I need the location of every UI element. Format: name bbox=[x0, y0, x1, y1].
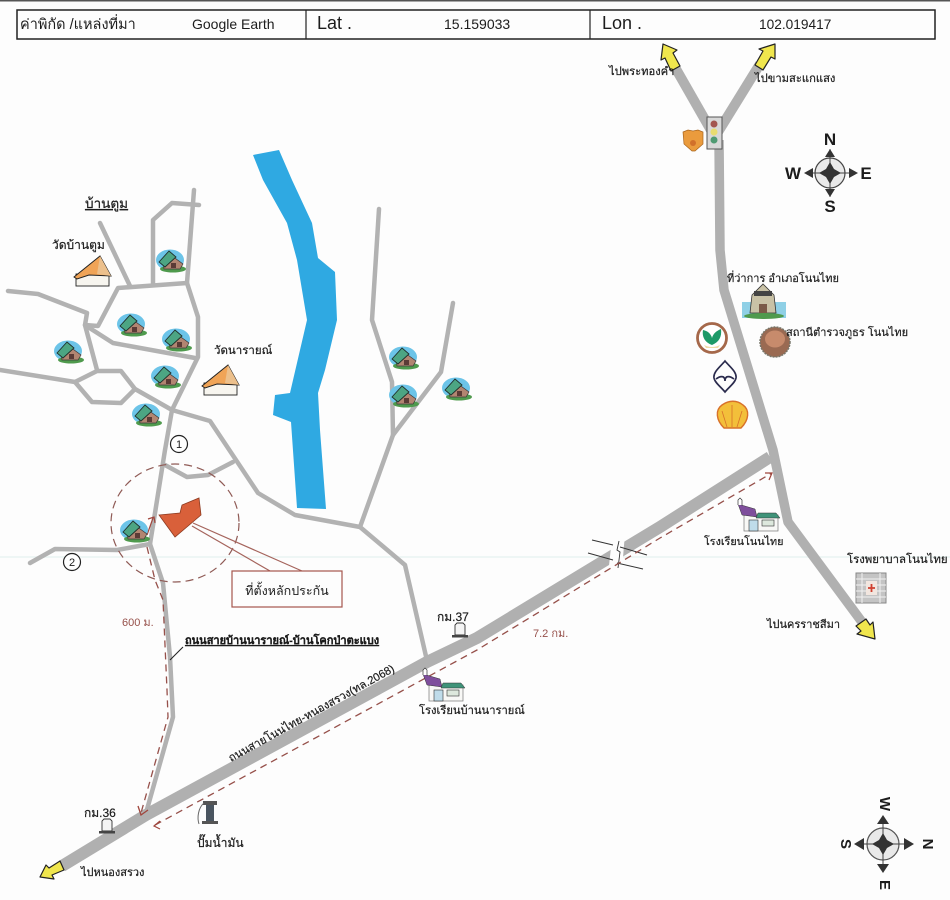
labels: สถานีตำรวจภูธร โนนไทย bbox=[786, 325, 908, 339]
compass north bbox=[785, 130, 872, 216]
labels: ถนนสายบ้านนารายณ์-บ้านโคกป่าตะแบง bbox=[185, 633, 379, 647]
road leader line bbox=[170, 647, 183, 660]
compass rotated: S bbox=[837, 839, 854, 849]
house icons bbox=[54, 250, 472, 542]
compass rotated bbox=[837, 797, 936, 890]
icon: Shell bbox=[717, 401, 748, 428]
icon: hospital bbox=[856, 573, 886, 603]
icon: district office bbox=[742, 284, 786, 319]
road to Nakhon Ratchasima bbox=[719, 140, 862, 622]
compass rotated: N bbox=[919, 839, 936, 849]
police shield icon bbox=[683, 130, 703, 151]
marker 2 bbox=[64, 554, 80, 570]
labels: ไปขามสะแกแสง bbox=[754, 72, 835, 85]
search radius circle bbox=[111, 464, 239, 582]
labels: ไปนครราชสีมา bbox=[766, 618, 840, 631]
labels: ปั๊มน้ำมัน bbox=[197, 834, 244, 850]
marker 2: 2 bbox=[69, 557, 75, 569]
river bbox=[253, 150, 337, 509]
icon: school Non Thai bbox=[738, 498, 780, 531]
labels: ถนนสายโนนไทย-หนองสรวง(ทล.2068) bbox=[226, 661, 397, 765]
header table: Lat . bbox=[317, 13, 352, 33]
compass north: N bbox=[824, 130, 836, 149]
labels: 600 ม. bbox=[122, 617, 154, 629]
labels: 7.2 กม. bbox=[533, 628, 568, 640]
header table: Google Earth bbox=[192, 16, 274, 32]
labels: วัดบ้านตูม bbox=[52, 238, 105, 253]
labels: กม.37 bbox=[437, 610, 469, 624]
icon: Bangkok bank bbox=[714, 361, 736, 392]
labels: ไปพระทองคำ bbox=[608, 65, 674, 78]
callout: collateral location: ที่ตั้งหลักประกัน bbox=[245, 581, 329, 598]
compass rotated: E bbox=[876, 880, 893, 890]
road fork bbox=[672, 62, 760, 132]
header table: Lon . bbox=[602, 13, 642, 33]
top edge strip bbox=[0, 0, 950, 2]
scan band bbox=[0, 556, 950, 558]
icon: km stone 37 bbox=[452, 623, 468, 638]
icon: police station bbox=[760, 327, 790, 357]
header table: ค่าพิกัด /แหล่งที่มา bbox=[20, 14, 136, 33]
labels: ไปหนองสรวง bbox=[80, 866, 144, 879]
dashed distance 7.2 km bbox=[154, 473, 772, 829]
traffic light bbox=[707, 117, 722, 149]
temple icons bbox=[74, 256, 239, 395]
labels: กม.36 bbox=[84, 806, 116, 820]
header table bbox=[17, 10, 935, 39]
compass north: E bbox=[860, 164, 872, 183]
labels: โรงเรียนบ้านนารายณ์ bbox=[419, 703, 525, 717]
marker 1: 1 bbox=[176, 439, 182, 451]
land plot bbox=[159, 498, 201, 537]
highway 2068 bbox=[62, 457, 770, 866]
dashed distance 600 m bbox=[138, 517, 168, 815]
labels: บ้านตูม bbox=[85, 196, 128, 212]
compass north: W bbox=[785, 164, 802, 183]
icon: Kasikorn bank bbox=[698, 324, 726, 352]
icon: km stone 36 bbox=[99, 819, 115, 834]
labels: ที่ว่าการ อำเภอโนนไทย bbox=[727, 270, 839, 285]
labels: โรงพยาบาลโนนไทย bbox=[847, 552, 948, 566]
header table: 102.019417 bbox=[759, 17, 831, 32]
callout: collateral location bbox=[192, 523, 342, 607]
labels: วัดนารายณ์ bbox=[214, 343, 273, 357]
labels: โรงเรียนโนนไทย bbox=[704, 535, 784, 548]
header table: 15.159033 bbox=[444, 16, 510, 32]
compass rotated: W bbox=[876, 797, 893, 812]
marker 1 bbox=[170, 436, 188, 452]
icon: school Ban Narai bbox=[423, 668, 465, 701]
break mark bbox=[588, 533, 647, 575]
icon: gas pump bbox=[198, 801, 218, 824]
village roads bbox=[0, 190, 453, 813]
compass north: S bbox=[824, 197, 836, 216]
